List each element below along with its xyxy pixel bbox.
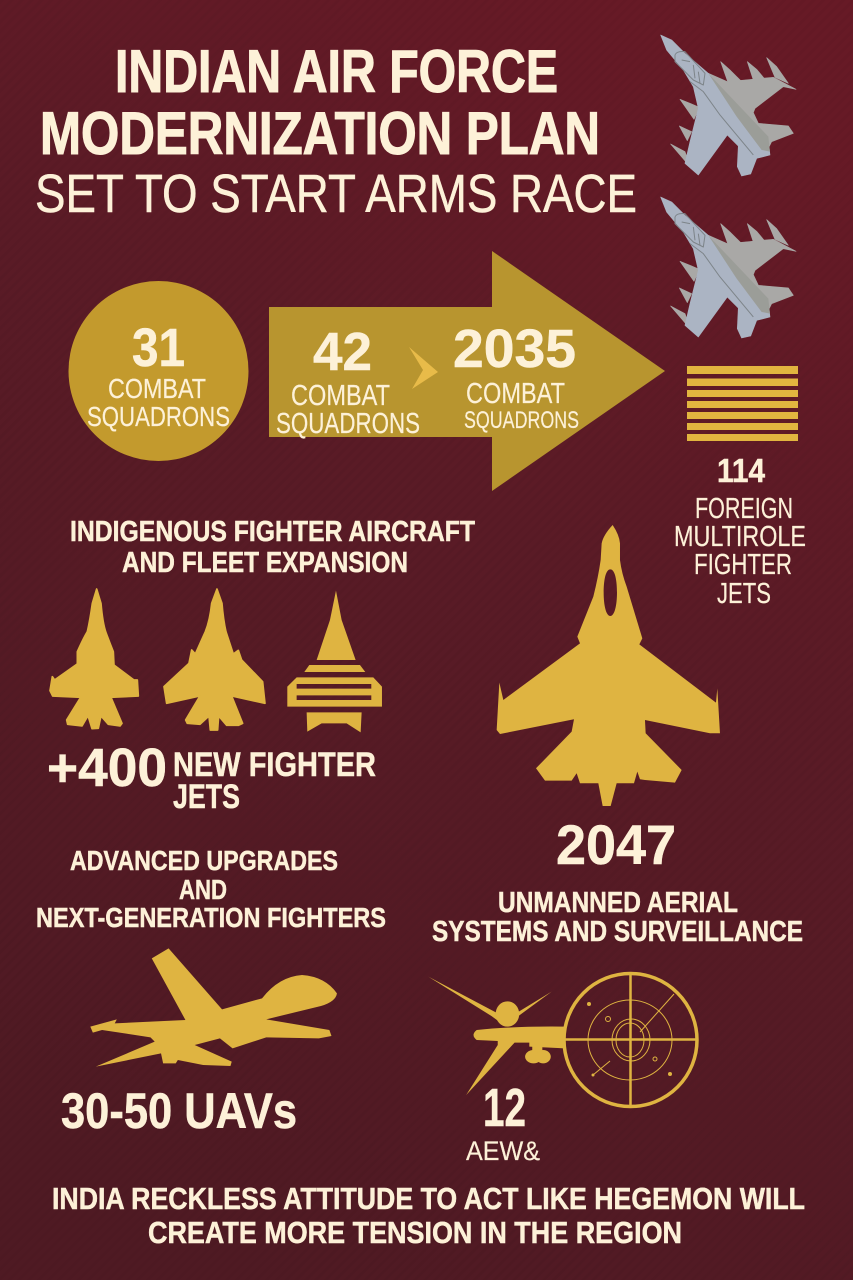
- heading: indigenous fighter aircraft: AND FLEET EXPANSION: [122, 547, 408, 579]
- icon: gray fighter jet top: [661, 35, 796, 176]
- stat: 2035 combat squadrons: COMBAT: [466, 378, 565, 410]
- heading: unmanned aerial systems: [432, 887, 803, 948]
- heading: indigenous fighter aircraft: [70, 516, 475, 579]
- title: [35, 38, 637, 224]
- icon: chevron: [409, 347, 438, 389]
- stat: 114 foreign multirole fighter jets: JETS: [717, 578, 771, 610]
- stat: 30-50 UAVs: 30-50 UAVs: [61, 1083, 297, 1139]
- heading: advanced upgrades: AND: [179, 874, 227, 905]
- stat: 42 combat squadrons: 42: [313, 322, 372, 382]
- panel: current squadrons circle: 31: [132, 318, 185, 378]
- heading: advanced upgrades: [36, 845, 386, 933]
- heading: unmanned aerial systems: UNMANNED AERIAL: [498, 887, 738, 919]
- stat: 42 combat squadrons: SQUADRONS: [276, 408, 420, 440]
- icon: fighter silhouette two: [164, 589, 265, 730]
- stat: 42 combat squadrons: COMBAT: [291, 380, 390, 412]
- heading: advanced upgrades: NEXT-GENERATION FIGHTERS: [36, 902, 386, 933]
- icon: striped fighter silhouette: [287, 591, 382, 732]
- heading: advanced upgrades: ADVANCED UPGRADES: [70, 845, 338, 876]
- stat: +400 new fighter jets: [47, 738, 376, 816]
- stat: 114 foreign multirole fighter jets: [674, 452, 806, 610]
- stat: 2035 combat squadrons: 2035: [453, 319, 576, 379]
- stat: 2047: 2047: [556, 813, 676, 876]
- title: INDIAN AIR FORCE: [115, 38, 558, 105]
- stat: 12 AEW&C: [466, 1078, 540, 1166]
- stat: 114 foreign multirole fighter jets: 114: [717, 452, 766, 489]
- stat: 114 foreign multirole fighter jets: MULTIROLE: [674, 521, 806, 553]
- panel: current squadrons circle: COMBAT: [108, 373, 206, 404]
- panel: current squadrons circle: [68, 281, 248, 461]
- stat: +400 new fighter jets: NEW FIGHTER: [173, 746, 376, 784]
- stat: +400 new fighter jets: +400: [47, 738, 167, 798]
- stat: 114 foreign multirole fighter jets: FOREIGN: [695, 493, 793, 525]
- icon: gray fighter jet lower: [661, 197, 796, 338]
- panel: target squadrons arrow: [269, 251, 665, 491]
- icon: stripes: [687, 366, 798, 441]
- stat: 12 AEW&C: AEW&: [466, 1136, 540, 1166]
- heading: indigenous fighter aircraft: INDIGENOUS FIGHTER AIRCRAFT: [70, 516, 475, 548]
- stat: 2035 combat squadrons: SQUADRONS: [464, 407, 579, 434]
- title: MODERNIZATION PLAN: [40, 100, 600, 167]
- icon: drone silhouette: [90, 948, 337, 1067]
- panel: current squadrons circle: SQUADRONS: [87, 401, 230, 432]
- stat: 2035 combat squadrons: [453, 319, 579, 434]
- radar: [564, 974, 697, 1106]
- icon: large fighter silhouette: [497, 525, 720, 806]
- stat: 114 foreign multirole fighter jets: FIGHTER: [694, 549, 792, 581]
- stat: +400 new fighter jets: JETS: [173, 778, 240, 816]
- icon: surveillance drone with radar: [428, 974, 697, 1106]
- title: SET TO START ARMS RACE: [35, 164, 637, 224]
- stat: 12 AEW&C: 12: [483, 1078, 526, 1138]
- stat: 42 combat squadrons: [276, 322, 420, 440]
- drone: [428, 977, 565, 1095]
- footer statement: CREATE MORE TENSION IN THE REGION: [148, 1215, 682, 1250]
- icon: fighter silhouette one: [50, 589, 138, 729]
- footer statement: [52, 1181, 805, 1250]
